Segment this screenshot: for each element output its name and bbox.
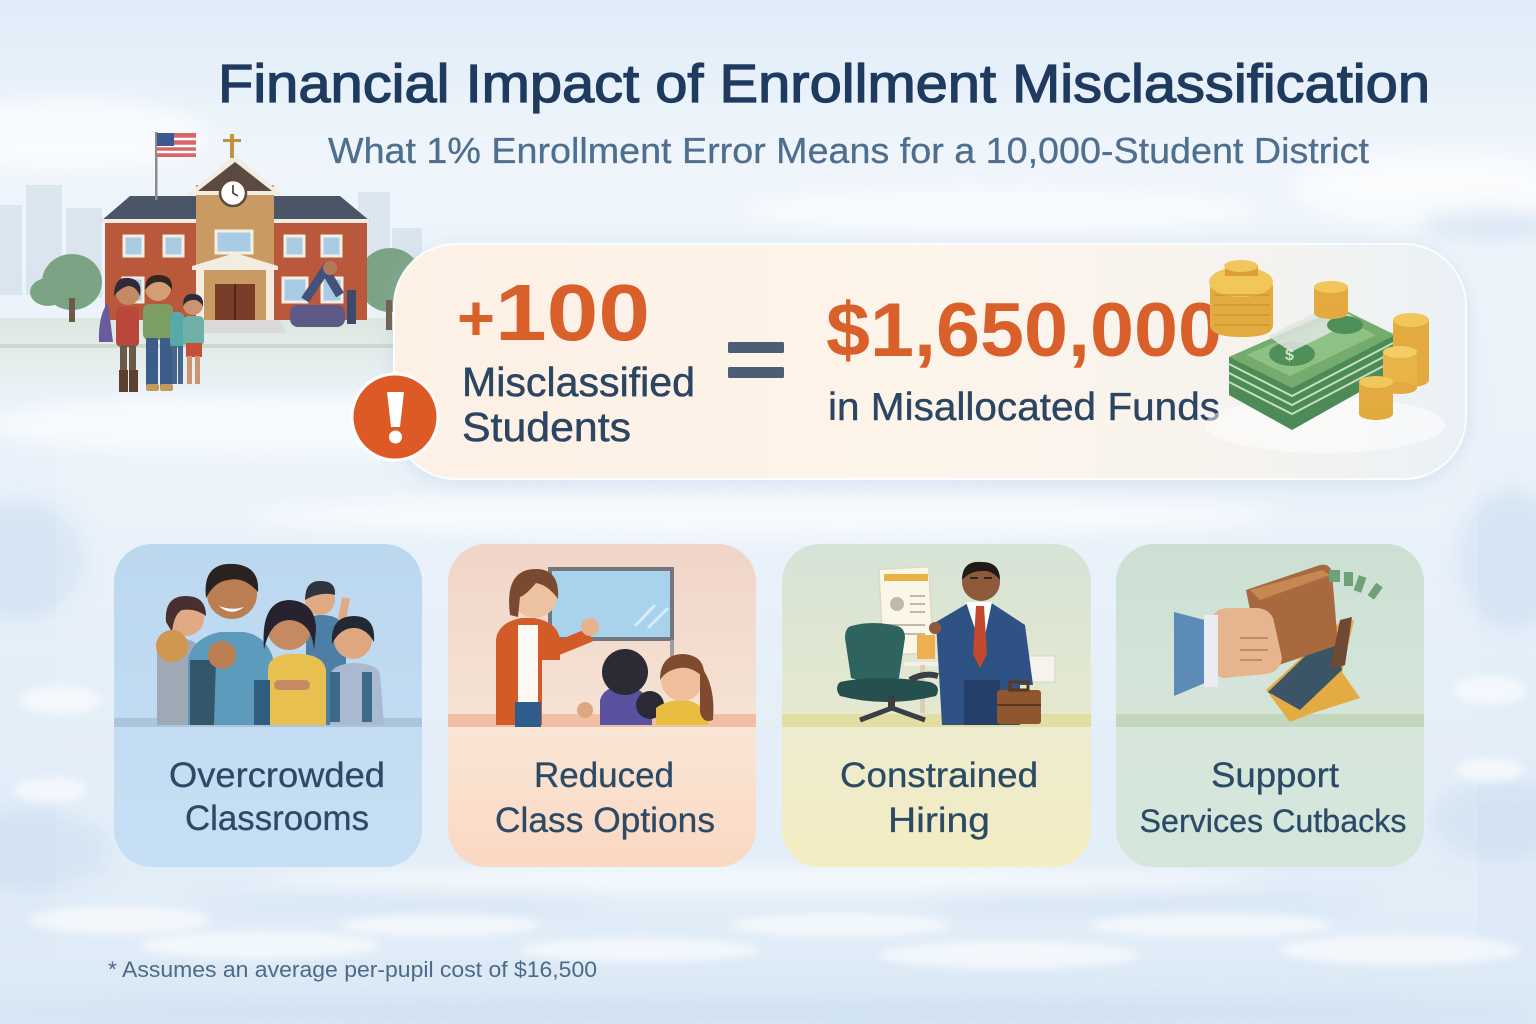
stat: misallocated funds: in Misallocated Funds <box>828 386 1220 429</box>
card: reduced class options <box>448 544 756 867</box>
panel: hero equation <box>352 244 1466 479</box>
label: Reduced <box>534 756 674 795</box>
label: Overcrowded <box>169 756 385 795</box>
label: Support <box>1211 756 1339 795</box>
distant skyline <box>0 185 422 298</box>
icon: cash and coins <box>1205 260 1445 453</box>
stat: +100 misclassified students: + <box>457 282 495 354</box>
icon: cash and coins: $ <box>1285 347 1294 364</box>
equals sign <box>728 342 784 378</box>
footnote: * Assumes an average per-pupil cost of $16,500 <box>108 957 597 982</box>
card: reduced class options: Class Options <box>495 801 715 840</box>
card: overcrowded classrooms: Classrooms <box>185 799 369 838</box>
illustration: crowd of students <box>114 564 422 727</box>
subtitle: What 1% Enrollment Error Means for a 10,000-Student District <box>328 130 1369 171</box>
lawn <box>0 318 400 404</box>
stat: +100 misclassified students: Misclassified <box>462 359 695 405</box>
illustration: teacher and students at whiteboard <box>448 569 756 727</box>
windows <box>123 231 342 302</box>
icon: warning exclamation badge <box>352 374 438 460</box>
stat: +100 misclassified students: 100 <box>495 268 650 357</box>
students <box>99 275 204 392</box>
card: constrained hiring <box>782 544 1091 867</box>
illustration: school building with students <box>0 132 422 404</box>
title: Financial Impact of Enrollment Misclassification <box>218 54 1430 114</box>
card: constrained hiring: Hiring <box>888 801 990 840</box>
trees <box>30 248 422 312</box>
label: Constrained <box>840 756 1038 795</box>
card: support services cutbacks <box>1116 544 1424 867</box>
stat: +100 misclassified students <box>457 268 695 450</box>
illustration: hand squeezing wallet <box>1116 565 1424 727</box>
bike-rack group <box>290 305 345 327</box>
stat: misallocated funds: $1,650,000 <box>826 288 1222 373</box>
money brick <box>1229 308 1395 430</box>
entrance <box>192 253 278 270</box>
card: overcrowded classrooms <box>114 544 422 867</box>
illustration: empty chair and hiring manager <box>782 562 1091 727</box>
stat: misallocated funds <box>826 288 1222 429</box>
flag <box>155 132 158 200</box>
card: support services cutbacks: Services Cutbacks <box>1140 803 1406 839</box>
large coin stack <box>1210 285 1273 337</box>
brick wings <box>105 220 367 320</box>
small coin stacks <box>1314 281 1429 420</box>
stat: +100 misclassified students: Students <box>462 404 631 450</box>
tower <box>196 185 274 320</box>
